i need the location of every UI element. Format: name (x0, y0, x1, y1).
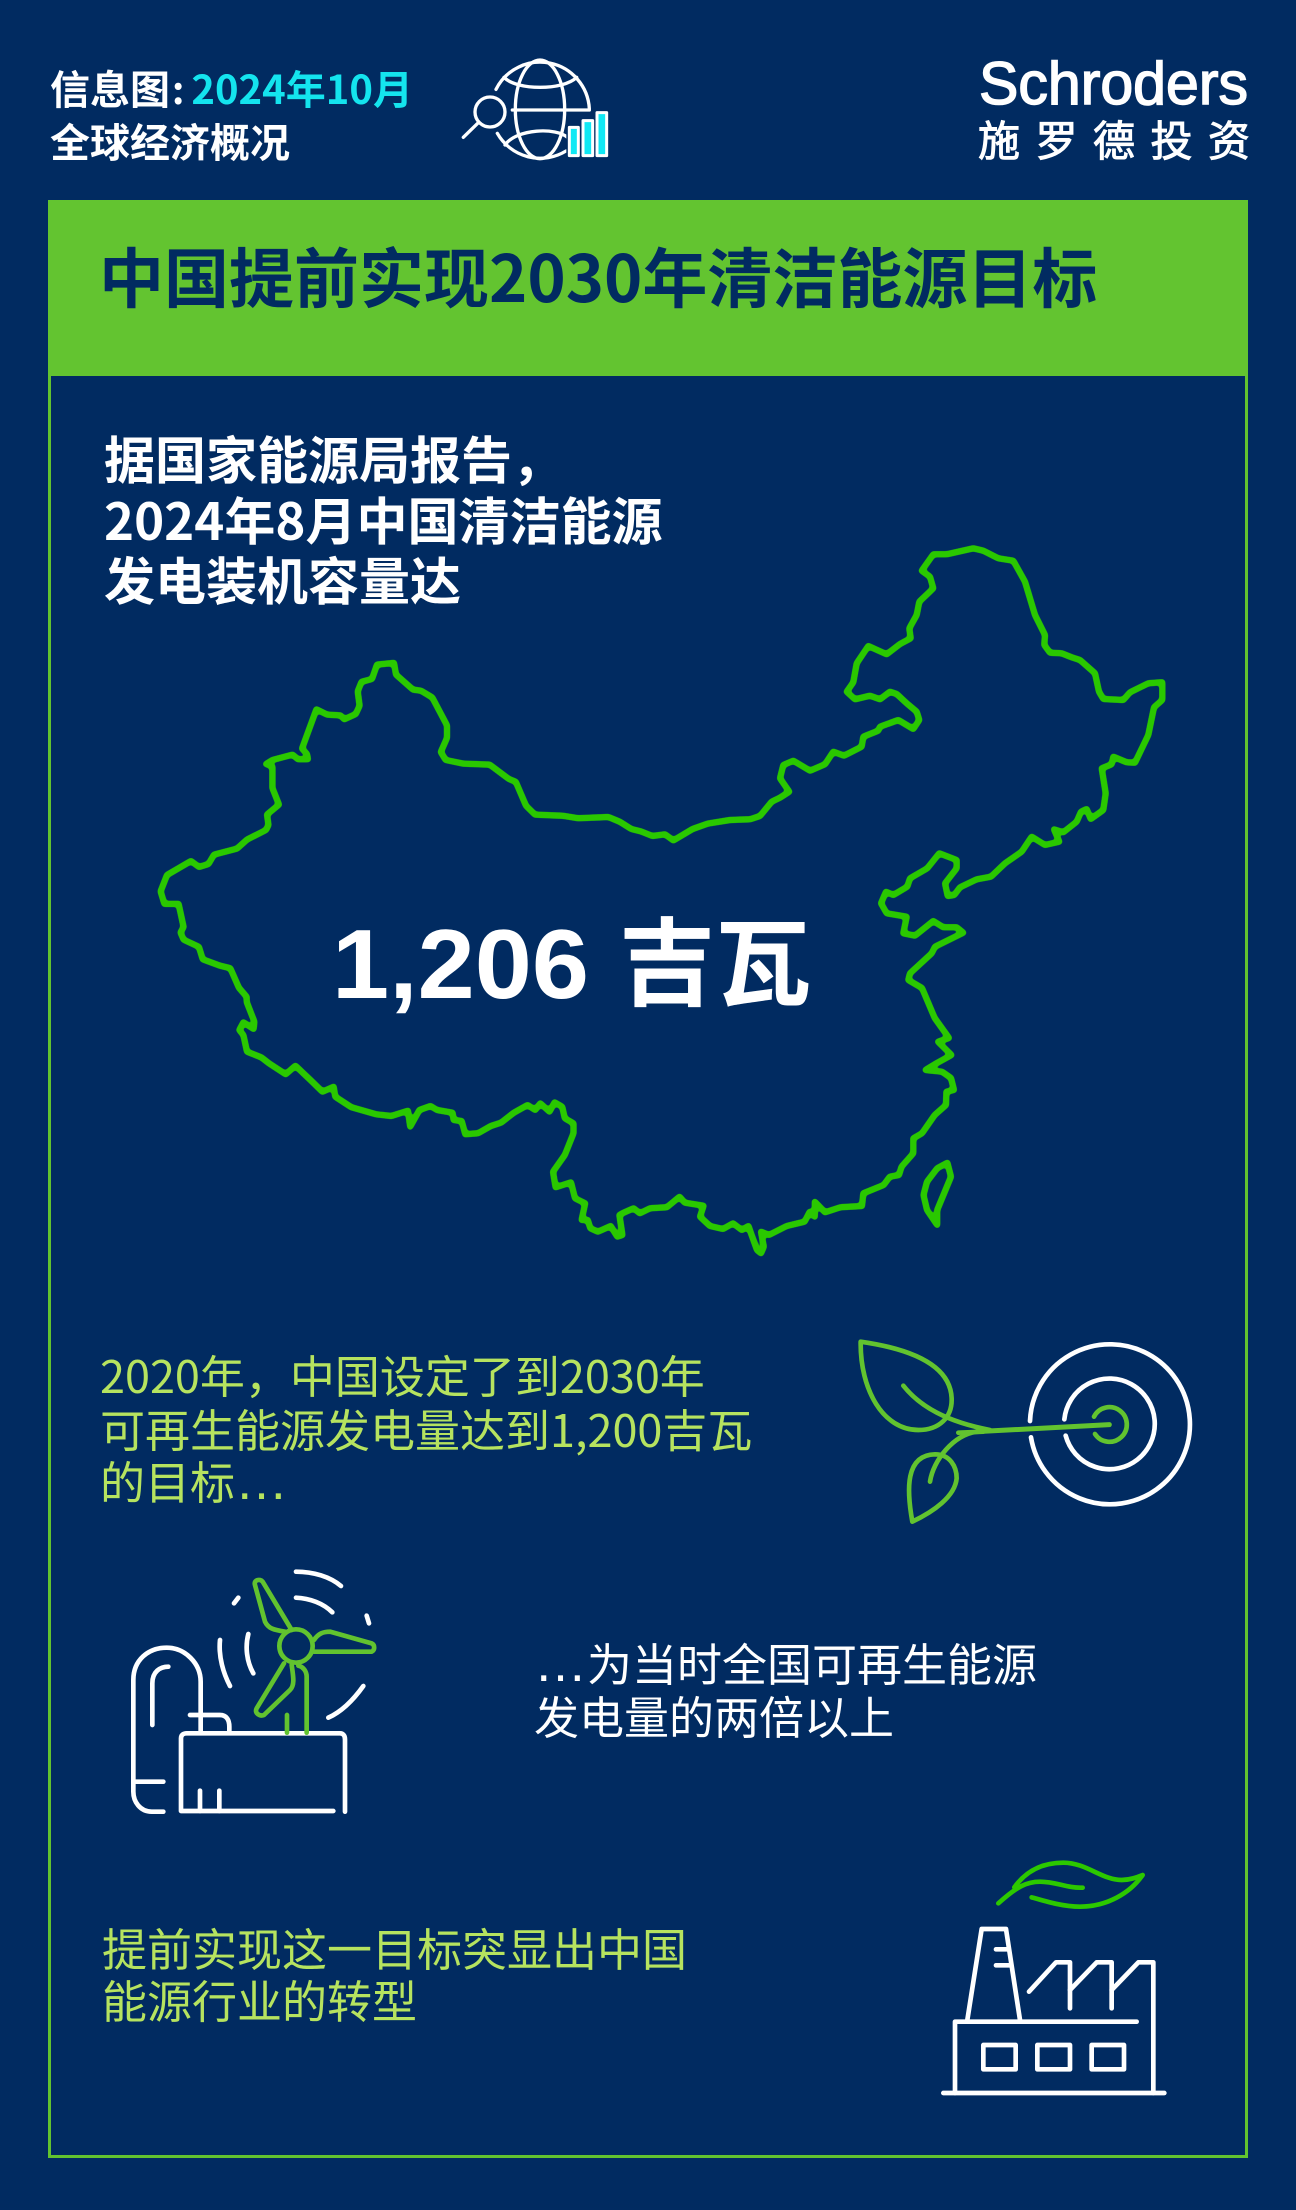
title banner (48, 200, 1248, 376)
icon: globe with magnifier and bars (463, 60, 607, 159)
text: 2020 target: 2020年，中国设定了到2030年 (100, 1341, 705, 1406)
headline figure: 吉瓦 (619, 887, 811, 1026)
header label: 全球经济概况 (50, 111, 290, 169)
text: 2020 target: 的目标… (100, 1447, 288, 1512)
headline figure: 1,206 (332, 909, 589, 1019)
text: more than double: 发电量的两倍以上 (534, 1682, 894, 1747)
intro text: 据国家能源局报告， (104, 420, 563, 494)
header label: 信息图:2024年10月 (50, 58, 413, 116)
text: 2020 target (100, 1341, 752, 1512)
text: more than double (534, 1629, 1037, 1747)
text: more than double: …为当时全国可再生能源 (534, 1629, 1037, 1694)
text: early achievement (102, 1914, 687, 2031)
logo: Schroders: 施罗德投资 (978, 108, 1266, 169)
intro text: 发电装机容量达 (104, 541, 461, 615)
intro text: 2024年8月中国清洁能源 (104, 481, 662, 555)
title banner: 中国提前实现2030年清洁能源目标 (99, 227, 1097, 321)
icon: factory with leaf (943, 1863, 1164, 2093)
text: early achievement: 提前实现这一目标突显出中国 (102, 1914, 687, 1979)
intro text (104, 420, 662, 615)
icon: leaves and target (861, 1342, 1190, 1522)
text: 2020 target: 可再生能源发电量达到1,200吉瓦 (100, 1395, 752, 1460)
header label (50, 58, 413, 169)
logo: Schroders (978, 50, 1266, 169)
text: early achievement: 能源行业的转型 (102, 1966, 417, 2031)
headline figure (332, 887, 811, 1026)
logo: Schroders: Schroders (979, 50, 1248, 117)
map of China outline (161, 548, 1162, 1253)
icon: wind turbine and industrial plant (133, 1572, 374, 1812)
